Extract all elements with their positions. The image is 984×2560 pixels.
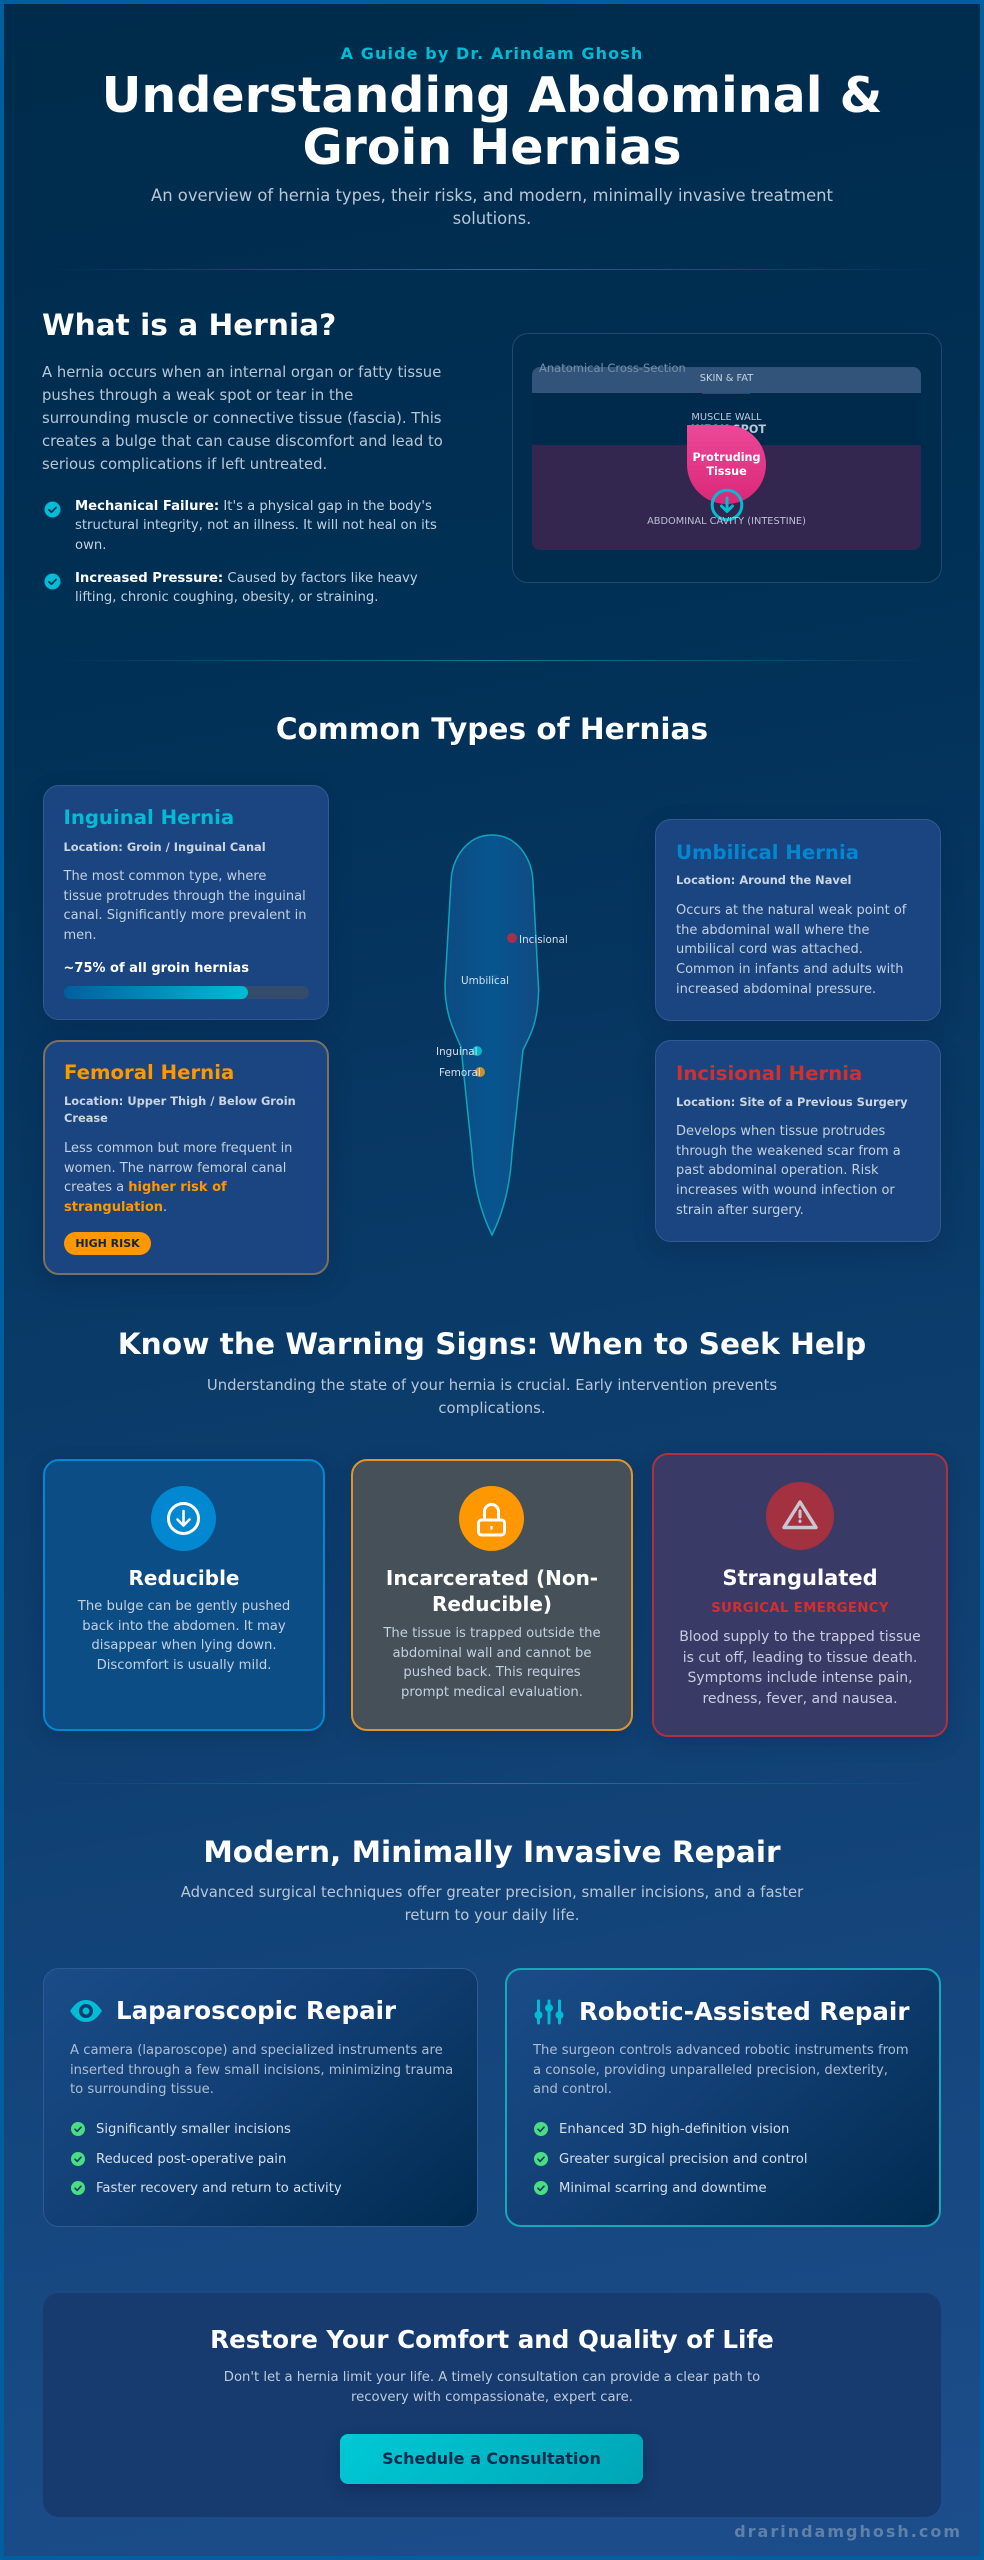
description: canal. Significantly more prevalent in (64, 908, 306, 923)
description: increased abdominal pressure. (676, 982, 876, 997)
description: strangulation. (64, 1200, 167, 1215)
description (78, 1599, 290, 1673)
intro paragraph: A hernia occurs when an internal organ or fatty tissue (42, 364, 441, 381)
marker: inguinal: Inguinal (436, 1046, 478, 1058)
bullet: increased pressure: Increased Pressure: Caused by factors like heavy (75, 570, 418, 586)
body silhouette (445, 835, 539, 1235)
description (676, 903, 907, 997)
description: a console, providing unparalleled precision, dexterity, (533, 2063, 888, 2078)
subheading: Understanding the state of your hernia is crucial. Early intervention prevents (207, 1377, 777, 1394)
description: redness, fever, and nausea. (702, 1691, 898, 1707)
card: reducible (43, 1459, 325, 1731)
badge: high risk: HIGH RISK (75, 1237, 140, 1250)
description (679, 1629, 921, 1707)
card: umbilical hernia (655, 819, 941, 1021)
description: Blood supply to the trapped tissue (679, 1629, 921, 1645)
heading: Modern, Minimally Invasive Repair (203, 1835, 781, 1869)
description: men. (64, 928, 97, 943)
title: Laparoscopic Repair (116, 1996, 396, 2025)
bullet: mechanical failure: Mechanical Failure: It's a physical gap in the body's (75, 498, 432, 514)
heading: Know the Warning Signs: When to Seek Help (118, 1327, 866, 1361)
description: Less common but more frequent in (64, 1141, 292, 1156)
list item 3: Faster recovery and return to activity (96, 2181, 342, 2196)
description (676, 1124, 901, 1218)
section heading: minimally invasive repair (180, 1835, 804, 1924)
title: Incarcerated (Non- (386, 1566, 598, 1590)
intro paragraph: creates a bulge that can cause discomfort and lead to (42, 433, 443, 450)
description: The most common type, where (64, 869, 266, 884)
section: what is a hernia (42, 308, 443, 605)
description: Discomfort is usually mild. (97, 1658, 271, 1673)
icon: reducible arrow (151, 1486, 216, 1551)
icon: check 2 (44, 574, 60, 590)
description: is cut off, leading to tissue death. (683, 1650, 917, 1666)
list item 1: Significantly smaller incisions (96, 2122, 291, 2137)
description: increases with wound infection or (676, 1183, 895, 1198)
weak spot label: WEAK SPOT (691, 423, 766, 436)
icon: eye (70, 2000, 102, 2022)
description: umbilical cord was attached. (676, 942, 863, 957)
header (102, 44, 882, 228)
description: pushed back. This requires (403, 1665, 581, 1680)
description: recovery with compassionate, expert care. (351, 2390, 633, 2405)
intro paragraph: pushes through a weak spot or tear in the (42, 387, 353, 404)
panel: call to action (43, 2293, 941, 2517)
location: Location: Around the Navel (676, 873, 851, 887)
title (102, 67, 882, 176)
subheading (180, 1884, 804, 1924)
title: Reducible) (432, 1592, 552, 1616)
subheading (207, 1377, 777, 1417)
list item 1: Enhanced 3D high-definition vision (559, 2122, 789, 2137)
card: femoral hernia (43, 1040, 329, 1275)
title: Strangulated (722, 1566, 878, 1590)
muscle wall label: MUSCLE WALL (691, 412, 762, 423)
description: disappear when lying down. (91, 1638, 277, 1653)
subtitle (151, 186, 833, 228)
description: The surgeon controls advanced robotic instruments from (533, 2043, 909, 2058)
card title: Inguinal Hernia (64, 806, 234, 829)
eyebrow: guide by: A Guide by Dr. Arindam Ghosh (341, 44, 643, 63)
intro paragraph: serious complications if left untreated. (42, 456, 327, 473)
description: and control. (533, 2082, 612, 2097)
heading: common types: Common Types of Hernias (276, 712, 708, 746)
bullet: increased pressure: lifting, chronic coughing, obesity, or straining. (75, 590, 378, 605)
description: the abdominal wall where the (676, 923, 869, 938)
bullet: mechanical failure: structural integrity, not an illness. It will not heal on its (75, 518, 437, 533)
description: back into the abdomen. It may (82, 1619, 286, 1634)
description: tissue protrudes through the inguinal (64, 889, 306, 904)
location: Location: Groin / Inguinal Canal (64, 840, 266, 854)
description: strain after surgery. (676, 1203, 804, 1218)
card title: Umbilical Hernia (676, 840, 859, 864)
layer: skin and fat: SKIN & FAT (700, 373, 753, 384)
bullet: mechanical failure (75, 498, 437, 553)
location: Crease (64, 1111, 108, 1125)
description: The tissue is trapped outside the (383, 1626, 601, 1641)
marker: incisional: Incisional (519, 934, 568, 946)
bullet: increased pressure (75, 570, 418, 605)
description: creates a higher risk of (64, 1180, 227, 1195)
title: Robotic-Assisted Repair (579, 1997, 909, 2026)
description: Develops when tissue protrudes (676, 1124, 885, 1139)
description (64, 1141, 292, 1215)
description (532, 2043, 909, 2097)
layer: muscle wall (532, 393, 921, 446)
watermark: drarindamghosh.com (734, 2522, 962, 2541)
abdominal cavity label: ABDOMINAL CAVITY (INTESTINE) (647, 516, 806, 527)
card title: Femoral Hernia (64, 1061, 234, 1084)
description: women. The narrow femoral canal (64, 1161, 286, 1176)
panel caption: Anatomical Cross-Section (539, 361, 686, 375)
card: strangulated (652, 1453, 948, 1737)
bullet: mechanical failure: own. (75, 538, 106, 553)
description: Common in infants and adults with (676, 962, 904, 977)
icon: push arrow circle (710, 488, 744, 522)
icon: warning (766, 1482, 834, 1550)
protruding tissue bulge: Tissue (706, 465, 747, 478)
emergency label: SURGICAL EMERGENCY (711, 1601, 889, 1616)
description: to surrounding tissue. (70, 2082, 214, 2097)
description: past abdominal operation. Risk (676, 1163, 878, 1178)
subheading: return to your daily life. (405, 1907, 579, 1924)
protruding tissue bulge (687, 425, 766, 504)
list item 2: Reduced post-operative pain (96, 2152, 286, 2166)
card title: Incisional Hernia (676, 1062, 862, 1084)
marker: femoral: Femoral (439, 1067, 481, 1079)
description: through the weakened scar from a (676, 1144, 901, 1159)
weak spot mark (702, 393, 750, 394)
subheading: Advanced surgical techniques offer greater precision, smaller incisions, and a faster (181, 1884, 803, 1901)
button: schedule (340, 2434, 643, 2484)
description: inserted through a few small incisions, minimizing trauma (70, 2063, 453, 2078)
title: Reducible (129, 1566, 239, 1590)
description: Don't let a hernia limit your life. A timely consultation can provide a clear path to (224, 2370, 760, 2385)
title: Understanding Abdominal & (102, 67, 882, 124)
heading: Restore Your Comfort and Quality of Life (210, 2325, 774, 2354)
list item 2: Greater surgical precision and control (559, 2152, 807, 2166)
description (224, 2370, 760, 2405)
location: Location: Upper Thigh / Below Groin (64, 1094, 296, 1108)
heading: What is a Hernia? (42, 308, 336, 342)
icon: check 1 (44, 502, 60, 518)
button: schedule: Schedule a Consultation (382, 2449, 601, 2468)
subtitle: solutions. (453, 209, 531, 228)
intro paragraph: surrounding muscle or connective tissue (fascia). This (42, 410, 442, 427)
description: prompt medical evaluation. (401, 1685, 583, 1700)
list item 3: Minimal scarring and downtime (559, 2181, 767, 2196)
description (383, 1626, 601, 1700)
title (386, 1566, 598, 1616)
description: A camera (laparoscope) and specialized instruments are (70, 2043, 443, 2058)
description: The bulge can be gently pushed (78, 1599, 290, 1614)
progress bar (64, 986, 308, 999)
location (64, 1094, 296, 1125)
marker: umbilical: Umbilical (461, 975, 509, 987)
description: Symptoms include intense pain, (687, 1670, 913, 1686)
title: Groin Hernias (302, 119, 682, 176)
description (63, 869, 306, 943)
card: inguinal hernia (43, 785, 329, 1020)
protruding tissue bulge: Protruding (692, 451, 761, 464)
icon: lock (459, 1486, 524, 1551)
badge: high risk (64, 1232, 151, 1255)
panel: anatomical cross-section (512, 333, 942, 583)
location: Location: Site of a Previous Surgery (676, 1095, 908, 1109)
card: incarcerated (351, 1459, 633, 1731)
subheading: complications. (438, 1400, 546, 1417)
subtitle: An overview of hernia types, their risks, and modern, minimally invasive treatment (151, 186, 833, 205)
layer: skin and fat (532, 367, 921, 393)
statistic: ~75% of all groin hernias (64, 961, 249, 976)
description: abdominal wall and cannot be (392, 1646, 592, 1661)
progress fill 75% (64, 986, 248, 999)
intro paragraph (42, 364, 443, 473)
icon: sliders (534, 2000, 564, 2024)
layer: abdominal cavity (532, 445, 921, 550)
card: incisional hernia (655, 1040, 941, 1242)
chart: body diagram with hernia locations (436, 834, 568, 1236)
description: Occurs at the natural weak point of (676, 903, 906, 918)
card: laparoscopic repair (43, 1968, 478, 2227)
description (70, 2043, 453, 2097)
section heading: warning signs (118, 1327, 866, 1417)
card: robotic-assisted repair (505, 1968, 941, 2227)
